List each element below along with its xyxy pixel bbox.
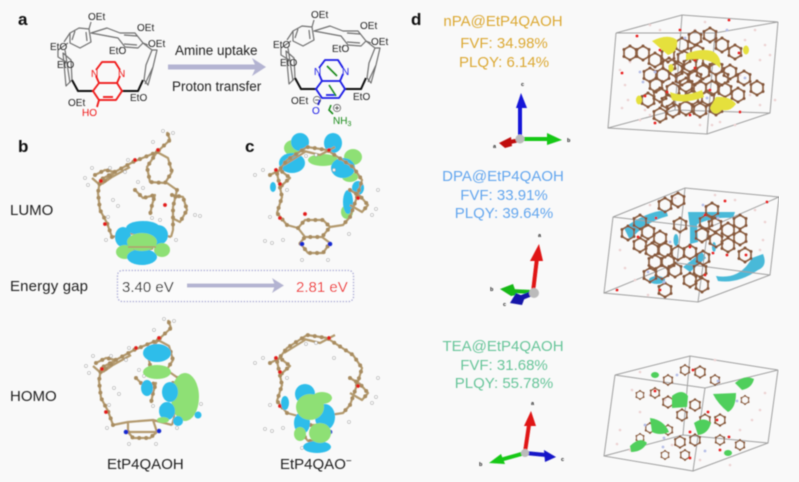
molecule: deprotonated complex with NH3+: OEt [291, 96, 308, 107]
stats: nPA: nPA@EtP4QAOH [443, 13, 563, 30]
molecule: deprotonated complex with NH3+: OEt [371, 37, 388, 48]
stats: nPA: FVF: 34.98% [460, 35, 548, 52]
stats: DPA: PLQY: 39.64% [455, 205, 553, 222]
stats: nPA: PLQY: 6.14% [459, 54, 549, 71]
molecule: EtP4QAOH structure: EtO [50, 42, 67, 53]
axes: TEA [479, 401, 564, 468]
LUMO of EtP4QAO- [255, 133, 378, 260]
molecule: deprotonated complex with NH3+: OEt [360, 21, 377, 32]
axes: DPA: c [503, 302, 506, 308]
LUMO of EtP4QAOH [85, 131, 200, 265]
HOMO of EtP4QAOH [86, 319, 202, 444]
axes: TEA: b [479, 462, 483, 468]
stats: DPA: DPA@EtP4QAOH [442, 168, 564, 185]
axes: nPA: a [493, 144, 497, 150]
panel letter a: a [18, 10, 28, 29]
panel letter c: c [245, 137, 254, 156]
crystal: TEA [604, 356, 778, 471]
HOMO of EtP4QAO- [255, 335, 378, 453]
energy gap callout: 3.40 eV [122, 279, 174, 296]
row label Energy gap: Energy gap [10, 278, 88, 295]
crystal: DPA [604, 188, 779, 302]
molecule: EtP4QAOH structure: OEt [148, 39, 165, 50]
stats: DPA: FVF: 33.91% [460, 187, 548, 204]
axes: nPA: c [521, 82, 524, 88]
arrow: amine uptake: Amine uptake [175, 43, 258, 58]
stats: nPA [443, 13, 563, 71]
molecule: deprotonated complex with NH3+: EtO [332, 44, 349, 55]
molecule: EtP4QAOH structure [50, 12, 165, 119]
molecule: deprotonated complex with NH3+: OEt [311, 10, 328, 21]
molecule: EtP4QAOH structure: OEt [68, 98, 85, 109]
axes: TEA: c [561, 457, 564, 463]
stats: TEA: PLQY: 55.78% [455, 375, 553, 392]
molecule: deprotonated complex with NH3+: EtO [280, 58, 297, 69]
molecule: EtP4QAOH structure: EtO [130, 93, 147, 104]
molecule: EtP4QAOH structure: N [91, 69, 98, 80]
stats: TEA: FVF: 31.68% [460, 357, 548, 374]
stats: DPA [442, 168, 564, 222]
molecule: deprotonated complex with NH3+: 3 [347, 121, 351, 128]
molecule: deprotonated complex with NH3+: EtO [353, 92, 370, 103]
axes: DPA [490, 233, 543, 308]
molecule: EtP4QAOH structure: OEt [88, 12, 105, 23]
panel a: amine uptake reaction [18, 10, 388, 128]
row label HOMO: HOMO [10, 388, 57, 405]
molecule: EtP4QAOH structure: N [118, 69, 125, 80]
molecule: EtP4QAOH structure: EtO [109, 46, 126, 57]
molecule: deprotonated complex with NH3+: NH [333, 116, 347, 127]
arrow: amine uptake: Proton transfer [172, 79, 262, 94]
axes: DPA: a [538, 233, 542, 239]
energy gap callout [118, 270, 354, 302]
caption EtP4QAO-: EtP4QAO [280, 456, 346, 473]
molecule: deprotonated complex with NH3+: O [312, 106, 320, 117]
stats: TEA [442, 338, 564, 392]
molecule: deprotonated complex with NH3+: N [314, 67, 321, 78]
panel b: EtP4QAOH orbitals [18, 131, 202, 444]
panel d: amine-loaded frameworks [411, 10, 779, 471]
energy gap callout: 2.81 eV [296, 279, 348, 296]
axes: nPA [493, 82, 571, 150]
molecule: deprotonated complex with NH3+: EtO [273, 40, 290, 51]
crystal: nPA [608, 15, 778, 134]
panel letter d: d [411, 10, 421, 29]
caption EtP4QAOH: EtP4QAOH [107, 456, 184, 473]
panel letter b: b [18, 137, 28, 156]
arrow: amine uptake [168, 43, 266, 94]
molecule: EtP4QAOH structure: EtO [57, 60, 74, 71]
axes: TEA: a [531, 401, 535, 407]
row label LUMO: LUMO [10, 202, 53, 219]
molecule: deprotonated complex with NH3+ [273, 10, 388, 128]
caption EtP4QAO-: − [346, 456, 352, 467]
axes: nPA: b [567, 138, 571, 144]
stats: TEA: TEA@EtP4QAOH [442, 338, 564, 355]
axes: DPA: b [490, 287, 494, 293]
panel c: EtP4QAO- orbitals [245, 133, 378, 453]
molecule: deprotonated complex with NH3+: N [342, 67, 349, 78]
molecule: EtP4QAOH structure: OEt [137, 23, 154, 34]
molecule: EtP4QAOH structure: HO [82, 108, 97, 119]
